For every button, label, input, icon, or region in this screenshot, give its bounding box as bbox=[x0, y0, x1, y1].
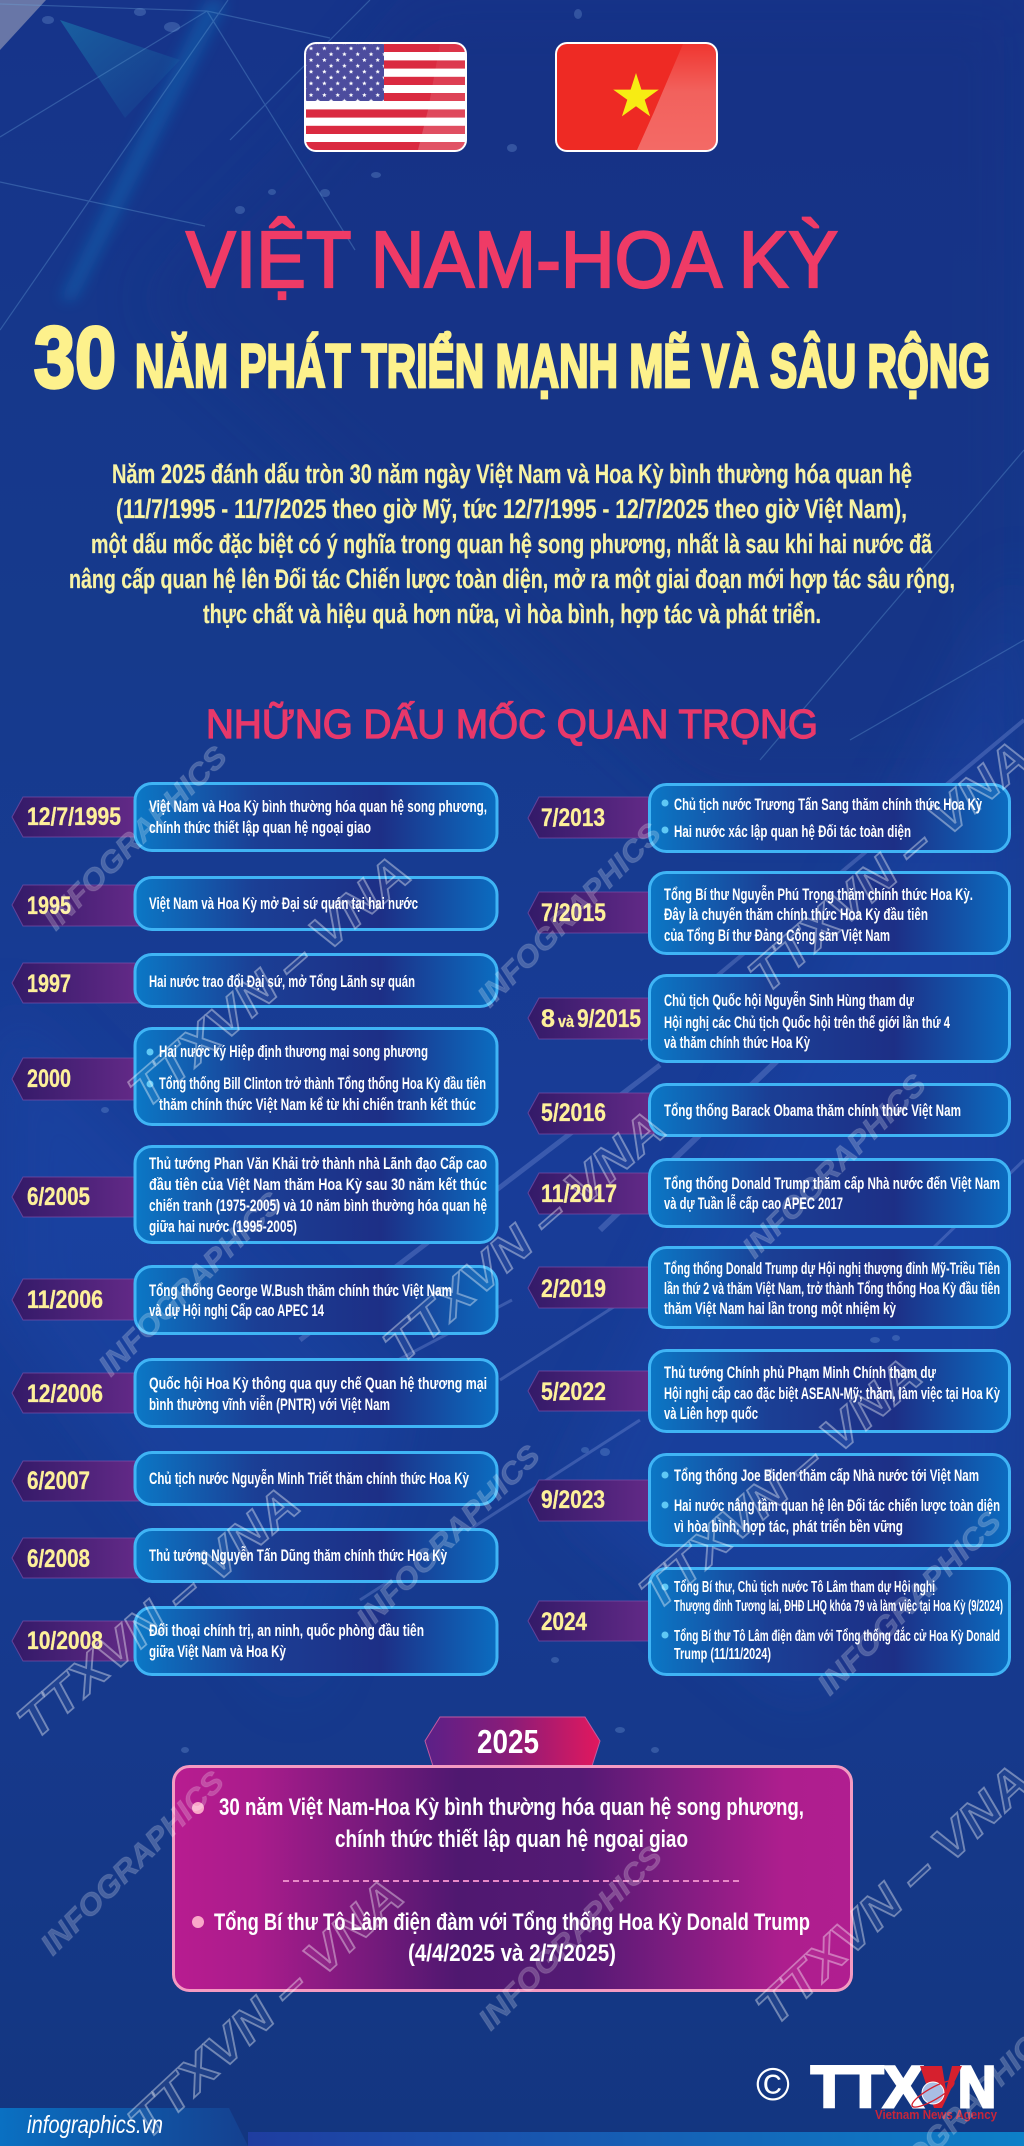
watermark TTXVN VNA: TTXVN – VNA bbox=[629, 1348, 932, 1621]
milestone 12/7/1995: Việt Nam và Hoa Kỳ bình thường hóa quan hệ song phương, bbox=[149, 798, 487, 816]
watermark INFOGRAPHICS: INFOGRAPHICS bbox=[472, 1840, 669, 2037]
logo: TTXVN: TTX bbox=[811, 2055, 923, 2120]
milestone 8 và 9/2015: và bbox=[558, 1012, 574, 1031]
milestone 2024 bbox=[528, 1568, 1010, 1674]
milestone 12/2006: bình thường vĩnh viễn (PNTR) với Việt Nam bbox=[149, 1395, 390, 1414]
2025 highlight bbox=[174, 1717, 852, 1990]
milestone 9/2023: vì hòa bình, hợp tác, phát triển bền vững bbox=[674, 1518, 903, 1536]
star bbox=[613, 73, 659, 116]
2025 tag: 2025 bbox=[477, 1723, 539, 1760]
milestone 6/2005: giữa hai nước (1995-2005) bbox=[149, 1218, 297, 1236]
milestone 5/2022: 5/2022 bbox=[541, 1378, 606, 1406]
milestone 6/2007 bbox=[12, 1452, 497, 1504]
milestone 11/2006: 11/2006 bbox=[27, 1286, 103, 1314]
milestone 2000 bbox=[12, 1028, 497, 1124]
milestone 10/2008: giữa Việt Nam và Hoa Kỳ bbox=[149, 1643, 287, 1661]
milestone 8 và 9/2015 bbox=[528, 976, 1010, 1062]
milestone 7/2015: 7/2015 bbox=[541, 899, 606, 927]
milestone 12/2006 bbox=[12, 1360, 497, 1426]
watermark INFOGRAPHICS: INFOGRAPHICS bbox=[350, 1439, 547, 1636]
milestone 8 và 9/2015: 9/2015 bbox=[577, 1005, 641, 1033]
title: VIỆT NAM-HOA KỲ bbox=[186, 215, 838, 304]
milestone 12/2006: 12/2006 bbox=[27, 1380, 103, 1408]
milestone 12/7/1995: 12/7/1995 bbox=[27, 803, 121, 831]
milestone 2/2019: 2/2019 bbox=[541, 1275, 606, 1303]
milestone 11/2017: 11/2017 bbox=[541, 1180, 617, 1208]
milestone 2024: Trump (11/11/2024) bbox=[674, 1646, 771, 1663]
milestone 6/2008: Thủ tướng Nguyễn Tấn Dũng thăm chính thức Hoa Kỳ bbox=[149, 1546, 448, 1565]
milestone 12/2006: Quốc hội Hoa Kỳ thông qua quy chế Quan hệ thương mại bbox=[149, 1375, 487, 1393]
flag: United States bbox=[304, 42, 467, 152]
milestone 7/2013: 7/2013 bbox=[541, 804, 605, 832]
milestone 6/2005: chiến tranh (1975-2005) và 10 năm bình thường hóa quan hệ bbox=[149, 1197, 487, 1215]
milestone 10/2008 bbox=[12, 1608, 497, 1674]
footer website: infographics.vn bbox=[27, 2111, 163, 2139]
milestone 1997: Hai nước trao đổi Đại sứ, mở Tổng Lãnh sự quán bbox=[149, 973, 415, 991]
2025 tag bbox=[425, 1717, 600, 1766]
milestone 8 và 9/2015: Chủ tịch Quốc hội Nguyễn Sinh Hùng tham dự bbox=[664, 991, 914, 1010]
timeline left column bbox=[12, 784, 497, 1674]
milestone 2/2019 bbox=[528, 1248, 1010, 1328]
watermark INFOGRAPHICS: INFOGRAPHICS bbox=[736, 1068, 933, 1265]
watermark INFOGRAPHICS: INFOGRAPHICS bbox=[34, 1765, 231, 1962]
watermark INFOGRAPHICS bbox=[34, 740, 1024, 2146]
milestone 11/2006 bbox=[12, 1266, 497, 1334]
milestone 10/2008: 10/2008 bbox=[27, 1627, 103, 1655]
2025 panel: 30 năm Việt Nam-Hoa Kỳ bình thường hóa quan hệ song phương, bbox=[219, 1794, 804, 1821]
intro paragraph bbox=[69, 459, 955, 629]
milestone 2000: Hai nước ký Hiệp định thương mại song phương bbox=[159, 1043, 428, 1061]
logo: TTXVN bbox=[756, 2055, 997, 2122]
milestone 6/2005 bbox=[12, 1146, 497, 1242]
milestone 1997: 1997 bbox=[27, 970, 71, 998]
2025 panel bbox=[174, 1766, 852, 1990]
milestone 8 và 9/2015: 8 bbox=[541, 1005, 555, 1033]
milestone 9/2023 bbox=[528, 1454, 1010, 1546]
subtitle bbox=[34, 310, 990, 406]
milestone 2000: thăm chính thức Việt Nam kể từ khi chiến tranh kết thúc bbox=[159, 1096, 476, 1114]
milestone 6/2005: đầu tiên của Việt Nam thăm Hoa Kỳ sau 30 năm kết thúc bbox=[149, 1176, 487, 1194]
watermark TTXVN VNA: TTXVN – VNA bbox=[738, 731, 1024, 1004]
milestone 6/2008 bbox=[12, 1530, 497, 1582]
milestone 2000: Tổng thống Bill Clinton trở thành Tổng thống Hoa Kỳ đầu tiên bbox=[159, 1075, 486, 1093]
milestone 2024: 2024 bbox=[541, 1608, 587, 1636]
milestone 8 và 9/2015: và thăm chính thức Hoa Kỳ bbox=[664, 1034, 811, 1052]
section heading: NHỮNG DẤU MỐC QUAN TRỌNG bbox=[206, 701, 818, 747]
watermark TTXVN VNA: TTXVN – VNA bbox=[373, 1101, 676, 1374]
milestone 11/2017 bbox=[528, 1160, 1010, 1226]
2025 panel: Tổng Bí thư Tô Lâm điện đàm với Tổng thống Hoa Kỳ Donald Trump bbox=[214, 1909, 810, 1936]
milestone 11/2006: Tổng thống George W.Bush thăm chính thức Việt Nam bbox=[149, 1282, 452, 1300]
milestone 12/7/1995: chính thức thiết lập quan hệ ngoại giao bbox=[149, 819, 371, 837]
logo: TTXVN: N bbox=[958, 2055, 996, 2120]
intro paragraph: thực chất và hiệu quả hơn nữa, vì hòa bình, hợp tác và phát triển. bbox=[203, 599, 821, 629]
flag: Vietnam bbox=[555, 42, 718, 152]
milestone 7/2013: Hai nước xác lập quan hệ Đối tác toàn diện bbox=[674, 823, 911, 841]
watermark INFOGRAPHICS: INFOGRAPHICS bbox=[471, 817, 668, 1014]
milestone 1995: 1995 bbox=[27, 892, 71, 920]
milestone 9/2023: 9/2023 bbox=[541, 1486, 605, 1514]
milestone 5/2016 bbox=[528, 1084, 1010, 1136]
watermark INFOGRAPHICS: INFOGRAPHICS bbox=[37, 740, 234, 937]
milestone 7/2013 bbox=[528, 784, 1010, 852]
milestone 7/2015 bbox=[528, 872, 1010, 954]
watermark TTXVN VNA: TTXVN – VNA bbox=[118, 1869, 414, 2146]
milestone 5/2022 bbox=[528, 1350, 1010, 1432]
2025 panel: chính thức thiết lập quan hệ ngoại giao bbox=[335, 1826, 688, 1853]
milestone 6/2005: 6/2005 bbox=[27, 1183, 90, 1211]
milestone 12/7/1995 bbox=[12, 784, 497, 850]
watermark TTXVN VNA: TTXVN – VNA bbox=[746, 1755, 1024, 2036]
2025 panel: (4/4/2025 và 2/7/2025) bbox=[408, 1940, 616, 1967]
watermark INFOGRAPHICS: INFOGRAPHICS bbox=[92, 1186, 289, 1383]
subtitle: 30 bbox=[34, 310, 116, 406]
milestone 6/2008: 6/2008 bbox=[27, 1545, 90, 1573]
logo: TTXVN: © bbox=[756, 2058, 790, 2110]
milestone 6/2005: Thủ tướng Phan Văn Khải trở thành nhà Lãnh đạo Cấp cao bbox=[149, 1155, 487, 1173]
milestone 11/2006: và dự Hội nghị Cấp cao APEC 14 bbox=[149, 1302, 325, 1320]
milestone 7/2015: của Tổng Bí thư Đảng Cộng sản Việt Nam bbox=[664, 927, 890, 945]
milestone 5/2016: 5/2016 bbox=[541, 1099, 606, 1127]
milestone 1995: Việt Nam và Hoa Kỳ mở Đại sứ quán tại hai nước bbox=[149, 895, 418, 913]
watermark TTXVN VNA: TTXVN – VNA bbox=[7, 1477, 310, 1750]
milestone 2000: 2000 bbox=[27, 1065, 71, 1093]
watermarks bbox=[7, 731, 1024, 2146]
milestone 2/2019: thăm Việt Nam hai lần trong một nhiệm kỳ bbox=[664, 1300, 897, 1318]
milestone 11/2017: và dự Tuần lễ cấp cao APEC 2017 bbox=[664, 1194, 843, 1213]
milestone 1997 bbox=[12, 954, 497, 1006]
watermark TTXVN VNA: TTXVN – VNA bbox=[118, 846, 421, 1119]
footer website bbox=[0, 2108, 248, 2146]
milestone 5/2022: và Liên hợp quốc bbox=[664, 1405, 758, 1423]
logo: TTXVN: Vietnam News Agency bbox=[875, 2108, 997, 2122]
milestone 6/2007: Chủ tịch nước Nguyễn Minh Triết thăm chính thức Hoa Kỳ bbox=[149, 1469, 470, 1488]
milestone 1995 bbox=[12, 878, 497, 930]
timeline right column bbox=[528, 784, 1010, 1674]
milestone 10/2008: Đối thoại chính trị, an ninh, quốc phòng đầu tiên bbox=[149, 1622, 424, 1640]
milestone 6/2007: 6/2007 bbox=[27, 1467, 90, 1495]
watermark TTXVN VNA bbox=[7, 731, 1024, 2146]
watermark INFOGRAPHICS: INFOGRAPHICS bbox=[811, 1505, 1008, 1702]
